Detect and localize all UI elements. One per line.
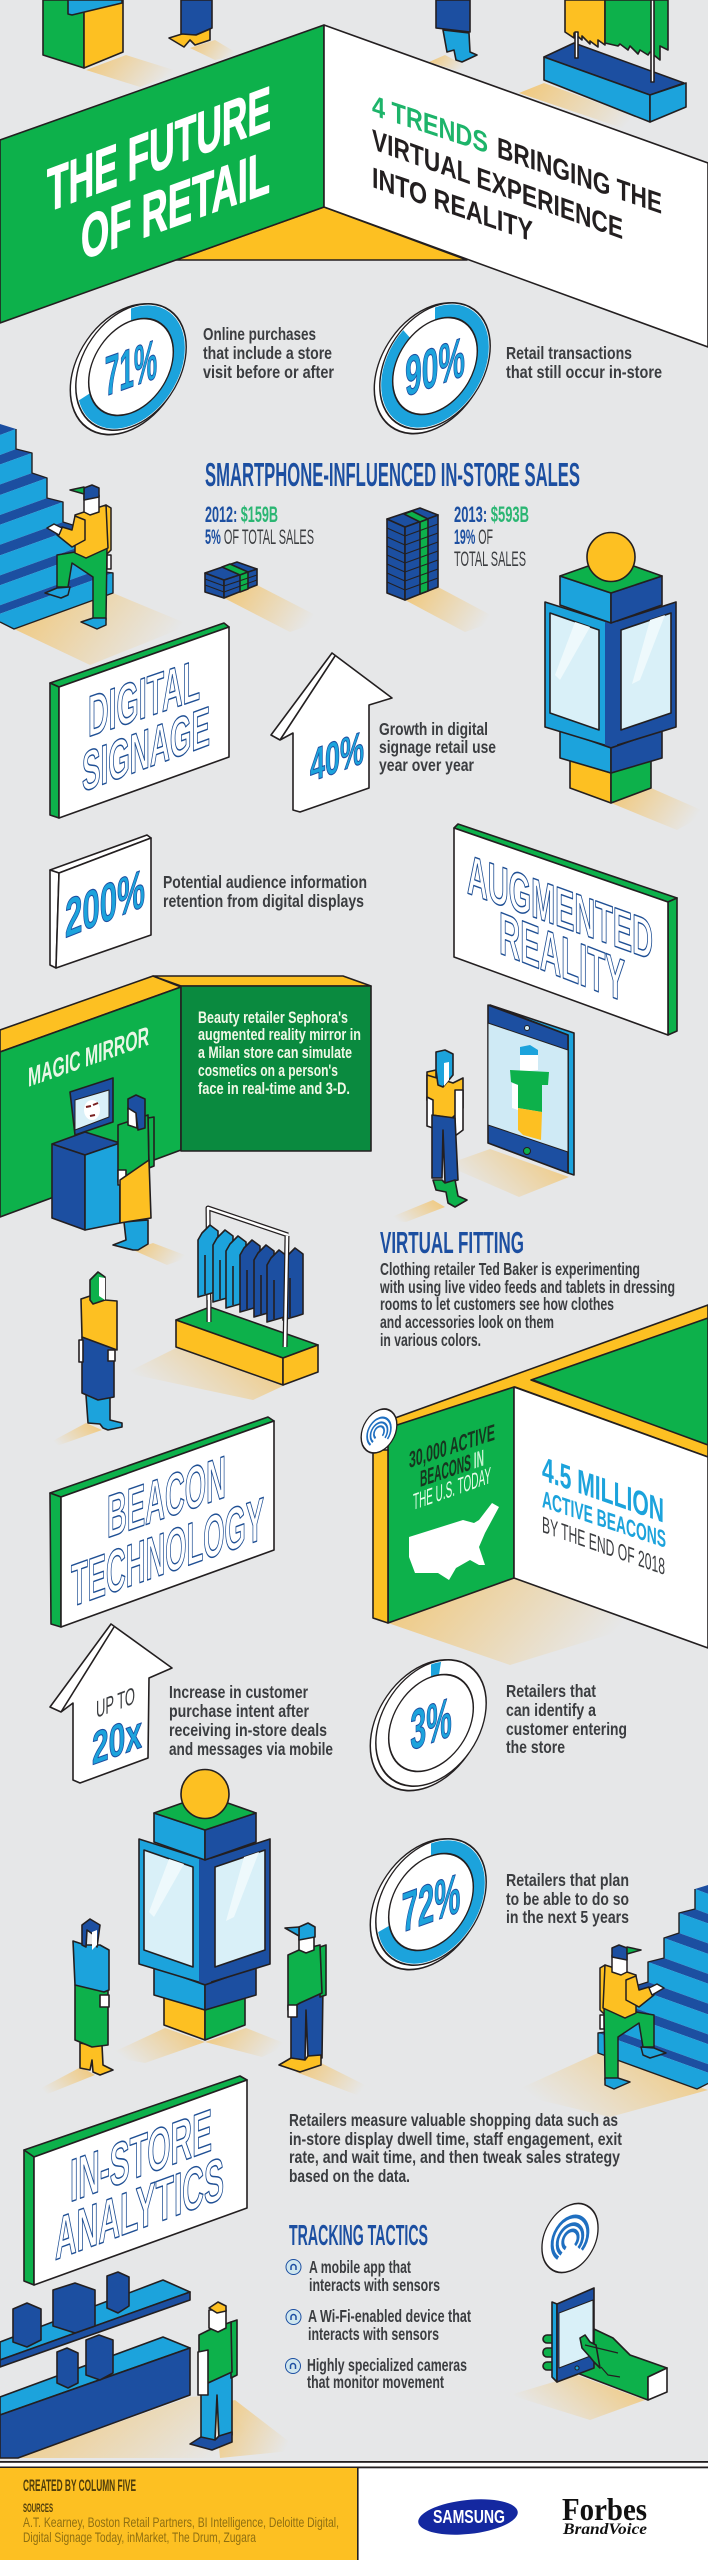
yellow column [373, 1450, 388, 1623]
magic mirror text [198, 1009, 361, 1098]
text: virtual fitting: and accessories look on them [380, 1312, 554, 1332]
staircase right with shadow [510, 1884, 708, 2117]
text: virtual fitting: in various colors. [380, 1330, 481, 1350]
woman at mirror [113, 1095, 190, 1265]
active beacons us text: BEACONS IN [420, 1446, 484, 1493]
subtitle: BRINGING THE [497, 132, 662, 221]
green wall [0, 987, 181, 1217]
text: in-store analytics: in-store display dwell time, staff engagement, exit [289, 2129, 622, 2149]
active beacons us text [409, 1420, 495, 1516]
text: in-store analytics: based on the data. [289, 2166, 410, 2186]
person browsing rack [45, 1272, 122, 1447]
text: TRACKING TACTICS [289, 2220, 428, 2252]
stat: 90% [374, 285, 662, 451]
footer credits panel: Digital Signage Today, inMarket, The Drum, Zugara [23, 2529, 256, 2545]
dark panel [181, 986, 371, 1151]
icon: tablet [445, 1005, 574, 1197]
footer credits panel: A.T. Kearney, Boston Retail Partners, BI Intelligence, Deloitte Digital, [23, 2514, 339, 2530]
tactic 1 text: interacts with sensors [309, 2275, 440, 2295]
tablet reflection figure [510, 1045, 549, 1140]
white wall face [514, 1387, 708, 1648]
bullet 1 [286, 2260, 301, 2274]
label 20x: Increase in customer [169, 1682, 308, 1702]
sign: 200 percent: 200% [65, 857, 145, 950]
hero: white wall [324, 25, 708, 347]
roof [395, 1305, 708, 1457]
magic mirror text: a Milan store can simulate [198, 1044, 352, 1062]
active beacons us text: 30,000 ACTIVE [409, 1420, 495, 1474]
label 40 percent: signage retail use [379, 737, 496, 757]
logo: forbes brandvoice: Forbes [562, 2491, 647, 2527]
sign: in-store analytics: ANALYTICS [55, 2145, 224, 2274]
donut 71 percent: 71% [105, 327, 157, 409]
subtitle: VIRTUAL EXPERIENCE [372, 124, 623, 246]
sign: digital signage: DIGITAL [88, 646, 200, 750]
label 72 percent: to be able to do so [506, 1889, 629, 1909]
footer credits panel: CREATED BY COLUMN FIVE [23, 2476, 136, 2495]
bullet 2 [286, 2310, 301, 2324]
label 20x: purchase intent after [169, 1701, 309, 1721]
heading: virtual fitting: VIRTUAL FITTING [380, 1225, 524, 1260]
magic mirror text: Beauty retailer Sephora's [198, 1009, 348, 1027]
tactic 1 text: A mobile app that [309, 2257, 411, 2277]
list: tracking tactics [286, 2257, 471, 2392]
bullet 3 [286, 2358, 300, 2374]
text: virtual fitting [379, 1259, 675, 1350]
title [47, 74, 271, 274]
sign: beacon technology: BEACON [107, 1444, 226, 1552]
logo: samsung: SAMSUNG [433, 2507, 505, 2527]
magic mirror text: augmented reality mirror in [198, 1026, 361, 1044]
label 71 percent: that include a store [203, 343, 332, 363]
stat: 72% donut [370, 1821, 486, 1987]
label 3 percent: customer entering [506, 1719, 627, 1739]
top scene: woman boots [429, 0, 477, 70]
icon: beacon disc [361, 1404, 397, 1458]
arrow: 40 percent [271, 653, 392, 812]
label 71 percent: Online purchases [203, 324, 316, 344]
label 20x: and messages via mobile [169, 1739, 333, 1759]
label 3 percent: the store [506, 1737, 565, 1757]
label 90 percent [506, 343, 662, 382]
label 90 percent: Retail transactions [506, 343, 632, 363]
magic mirror text: face in real-time and 3-D. [198, 1080, 350, 1098]
label 200 percent: retention from digital displays [163, 891, 364, 911]
counter [52, 1132, 120, 1230]
man at shelves [190, 2302, 300, 2458]
top scene: kiosk base [43, 0, 180, 87]
us map [409, 1503, 499, 1580]
logo: samsung [416, 2495, 520, 2539]
text: in-store analytics: Retailers measure valuable shopping data such as [289, 2110, 618, 2130]
stat 2013: TOTAL SALES [454, 548, 526, 571]
label 72 percent [506, 1870, 629, 1927]
donut 90 percent: 90% [405, 325, 465, 409]
panel: beacon room [361, 1305, 708, 1665]
mirror monitor [70, 1078, 113, 1135]
green wall face [388, 1387, 514, 1623]
title: THE FUTURE [47, 74, 271, 226]
top scene: clothing rack [519, 0, 686, 130]
label 3 percent: can identify a [506, 1700, 596, 1720]
top scene: person legs [169, 0, 240, 60]
hero: green wall [0, 25, 324, 323]
label 20x: receiving in-store deals [169, 1720, 327, 1740]
lower shelf [0, 2337, 190, 2458]
label 71 percent: visit before or after [203, 362, 334, 382]
kiosk lower with shadows [105, 1770, 289, 2063]
person facing tablet [384, 1050, 467, 1222]
tactic 3 text [307, 2355, 467, 2392]
tactic 2 text [308, 2306, 471, 2344]
floor triangle under hero [176, 207, 467, 260]
label 40 percent: year over year [379, 755, 474, 775]
icon: large money stack [387, 508, 500, 632]
title: OF RETAIL [81, 138, 270, 274]
sign: digital signage: SIGNAGE [82, 695, 210, 805]
text: in-store analytics: rate, and wait time, and then tweak sales strategy [289, 2147, 620, 2167]
sign: in-store analytics: IN-STORE [70, 2097, 212, 2216]
shelves with boxes [0, 2272, 190, 2458]
stat 2013 [454, 502, 529, 571]
boxes [13, 2272, 129, 2388]
text: virtual fitting: rooms to let customers see how clothes [380, 1294, 614, 1314]
footer credits panel [0, 2467, 359, 2560]
stat 2013: 19% OF [454, 526, 493, 549]
icon: small money stack [205, 562, 325, 632]
tactic 2 text: A Wi-Fi-enabled device that [308, 2306, 471, 2326]
stat: 3% donut: 3% [410, 1685, 452, 1763]
man by kiosk [279, 1923, 375, 2095]
arrow: up to 20x [50, 1624, 172, 1783]
stat: 3% donut [370, 1642, 486, 1808]
magic mirror text: cosmetics on a person's [198, 1062, 338, 1080]
tactic 3 text: Highly specialized cameras [307, 2355, 467, 2375]
label 3 percent: Retailers that [506, 1681, 596, 1701]
icon: hand holding phone [510, 2288, 667, 2420]
wall top [0, 976, 371, 1052]
stat 2012: 2012: $159B [205, 502, 278, 527]
label 20x [169, 1682, 333, 1759]
label 40 percent [379, 719, 496, 775]
label 200 percent [163, 872, 367, 911]
staircase left with shadow [0, 424, 190, 665]
sign: 200 percent [50, 835, 151, 968]
label 72 percent: in the next 5 years [506, 1907, 629, 1927]
label 3 percent [506, 1681, 627, 1757]
footer band [0, 2461, 708, 2560]
tactic 2 text: interacts with sensors [308, 2324, 439, 2344]
stat: 71% [70, 286, 334, 452]
upper shelf [0, 2280, 190, 2367]
sign: beacon technology [50, 1417, 274, 1627]
donut 71 percent [70, 286, 186, 452]
arrow: 40 percent: 40% [310, 722, 364, 793]
label 40 percent: Growth in digital [379, 719, 488, 739]
person climbing stairs [45, 485, 111, 629]
donut 90 percent [374, 285, 490, 451]
magic mirror heading: MAGIC MIRROR [28, 1020, 149, 1093]
tactic 1 text [309, 2257, 440, 2295]
arrow: up to 20x: UP TO [96, 1683, 135, 1724]
clothing rack middle [126, 1208, 318, 1400]
label 71 percent [203, 324, 334, 382]
sign: in-store analytics [24, 2076, 247, 2285]
stat: 72% donut: 72% [402, 1861, 460, 1945]
label 72 percent: Retailers that plan [506, 1870, 629, 1890]
footer credits panel: SOURCES [23, 2501, 53, 2515]
subtitle: INTO REALITY [372, 162, 533, 249]
4.5 million [542, 1450, 666, 1581]
logo: forbes brandvoice: BrandVoice [562, 2521, 647, 2538]
sign: digital signage [50, 623, 229, 818]
stat 2012: 5% OF TOTAL SALES [205, 526, 314, 549]
icon: beacon disc large [542, 2195, 598, 2281]
label 90 percent: that still occur in-store [506, 362, 662, 382]
subtitle: 4 TRENDS [372, 90, 488, 160]
panel: beacon room: THE U.S. TODAY [413, 1463, 491, 1516]
subtitle [372, 90, 662, 249]
panel: magic mirror [0, 976, 371, 1265]
woman by kiosk [32, 1919, 113, 2095]
label 200 percent: Potential audience information [163, 872, 367, 892]
kiosk right [545, 532, 708, 830]
arrow: up to 20x: 20x [92, 1706, 142, 1776]
stat 2012 [205, 502, 314, 549]
text: TECHNOLOGY [71, 1485, 264, 1621]
tactic 3 text: that monitor movement [307, 2372, 444, 2392]
floor shadow under shelves [18, 2395, 270, 2458]
stat 2013: 2013: $593B [454, 502, 529, 527]
text: in-store analytics [289, 2110, 622, 2186]
person climbing stairs right [600, 1945, 666, 2089]
